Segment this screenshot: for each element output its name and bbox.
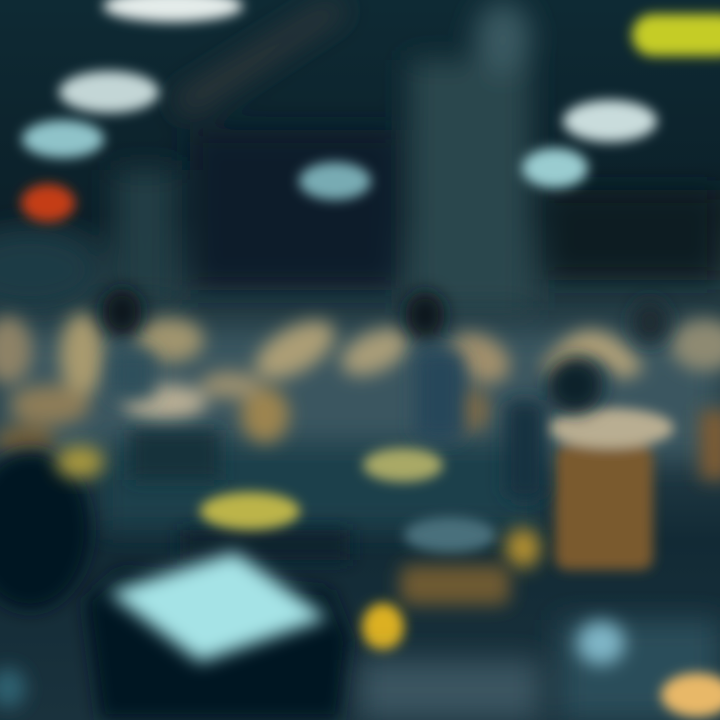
red sign: left [21,184,75,222]
crowd: right large figure [546,408,674,570]
background structures: columns and beams [0,0,720,310]
crowd: blue-grey base band [0,330,720,530]
yellow sign: top right [632,14,720,56]
glowing screen [108,552,328,662]
ceiling light: top centre [103,0,243,22]
blue glow: bottom left [0,668,26,708]
yellow tint: left desk [56,446,104,478]
dark foreground desk [85,570,350,720]
crowd: dark heads and bodies [0,288,668,610]
ceiling light: right teal [522,148,588,188]
ceiling light: centre teal [299,162,371,200]
orange glow: bottom right [661,673,720,717]
ceiling light: right white [563,100,657,142]
yellow light: bottom centre [362,603,404,651]
crowd: tan shapes [0,309,720,480]
ceiling light: upper left [59,71,159,113]
desks: yellow and blue surfaces [200,492,300,530]
blue glow: lower right [577,621,625,665]
lower right floor tones [360,620,720,720]
ceiling light: left teal [22,120,104,158]
